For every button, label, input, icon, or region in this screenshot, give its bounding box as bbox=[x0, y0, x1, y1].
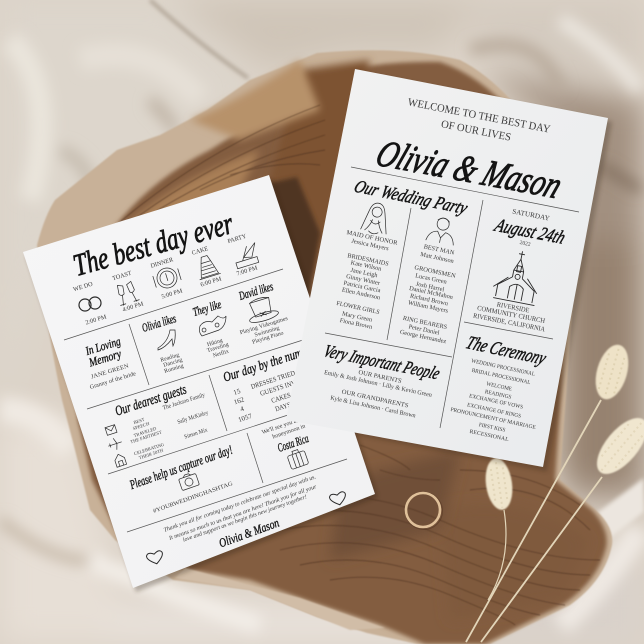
venue: COMMUNITY CHURCH bbox=[476, 305, 546, 325]
hashtag: #YOURWEDDINGHASHTAG bbox=[152, 481, 234, 515]
schedule labels: 6:00 PM bbox=[200, 275, 223, 288]
icon: champagne toast bbox=[115, 281, 140, 306]
parents and grandparents bbox=[323, 369, 433, 420]
guest awards: CELEBRATING bbox=[133, 442, 165, 456]
bridal party names: Ellen Anderson bbox=[341, 287, 382, 302]
pampas head 1 bbox=[590, 341, 634, 403]
thank you note: It means so much to us that you are here! Thank you for all your bbox=[167, 483, 318, 542]
they like: Traveling bbox=[206, 342, 230, 354]
in loving memory: Granny of the bride bbox=[89, 370, 137, 391]
bridal party names: Kate Wilson bbox=[350, 259, 383, 273]
david likes: Playing Piano bbox=[252, 330, 284, 346]
parents and grandparents: Kyle & Lisa Johnson · Carol Brown bbox=[330, 395, 417, 420]
icon: groom bbox=[426, 216, 458, 245]
bridal party names: BRIDESMAIDS bbox=[347, 252, 390, 268]
schedule labels: 5:00 PM bbox=[161, 287, 184, 300]
groom party names: RING BEARERS bbox=[402, 315, 448, 331]
icon: church bbox=[491, 247, 544, 306]
groom party names: BEST MAN bbox=[423, 243, 455, 257]
groom party names bbox=[399, 243, 457, 345]
guest awards: Sally McKinley bbox=[177, 410, 209, 426]
icon: high heel bbox=[158, 330, 175, 350]
bridal party names bbox=[336, 229, 399, 331]
welcome heading: OF OUR LIVES bbox=[440, 118, 512, 144]
ceremony order list: EXCHANGE OF VOWS bbox=[468, 393, 524, 411]
bridal party names: Fiona Brown bbox=[339, 317, 374, 331]
icon: house bbox=[113, 453, 127, 467]
capture heading: Please help us capture our day! bbox=[127, 442, 234, 492]
groom party names: George Hernandez bbox=[399, 329, 447, 345]
icon: camera bbox=[178, 472, 199, 491]
costa rica: Costa Rica bbox=[276, 431, 310, 455]
in loving memory: Memory bbox=[86, 346, 123, 370]
ceremony order list: FIRST KISS bbox=[478, 422, 506, 434]
icon: envelope bbox=[105, 425, 117, 435]
guest awards: SPEECH bbox=[132, 421, 151, 431]
we'll see you: honeymoon in bbox=[272, 424, 306, 440]
guest awards: TRAVELED bbox=[133, 426, 158, 438]
ceremony order list: PRONOUNCEMENT OF MARRIAGE bbox=[450, 407, 537, 431]
fold crease bbox=[150, 0, 248, 78]
in loving memory: In Loving bbox=[83, 334, 122, 358]
heading: the ceremony: The Ceremony bbox=[463, 333, 550, 369]
icon: heart left bbox=[146, 550, 165, 566]
olivia likes: Olivia likes bbox=[140, 311, 178, 335]
numbers list: 1057 bbox=[237, 412, 253, 424]
title: The best day ever bbox=[69, 205, 237, 283]
numbers list: 4 bbox=[239, 405, 245, 413]
they like: Hiking bbox=[206, 338, 224, 348]
icon: dinner plate bbox=[152, 265, 182, 291]
guest awards: THE FARTHEST bbox=[130, 430, 163, 444]
wood heart bbox=[76, 62, 607, 644]
signature: Olivia & Mason bbox=[217, 516, 281, 550]
guest awards bbox=[130, 392, 209, 460]
schedule labels: TOAST bbox=[111, 270, 133, 282]
thank you note: Thank you all for coming today to celebrate our special day with us. bbox=[163, 473, 317, 534]
groom party names: Peter Daniel bbox=[408, 323, 440, 337]
ceremony order list: WEDDING PROCESSIONAL bbox=[471, 358, 536, 378]
ceremony order list bbox=[450, 358, 537, 443]
left card: day timeline bbox=[23, 175, 375, 588]
thank you note: love and support as we begin this new journey together! bbox=[182, 494, 308, 544]
numbers list bbox=[232, 369, 311, 424]
icon: gramophone bbox=[232, 243, 261, 269]
numbers list: 15 bbox=[232, 387, 242, 397]
ceremony order list: EXCHANGE OF RINGS bbox=[466, 402, 522, 420]
groom party names: Matt Johnson bbox=[420, 251, 455, 265]
david likes: David likes bbox=[237, 279, 275, 303]
ceremony order list: RECESSIONAL bbox=[469, 429, 510, 443]
bridal party names: Ginny Winter bbox=[345, 273, 381, 287]
guest awards: BEST bbox=[133, 417, 145, 425]
guest awards: Simon Mix bbox=[184, 427, 208, 441]
schedule labels: CAKE bbox=[191, 245, 209, 257]
date block: August 24th bbox=[490, 215, 569, 248]
ceremony order list: BRIDAL PROCESSIONAL bbox=[471, 368, 531, 386]
heading: wedding party: Our Wedding Party bbox=[351, 176, 472, 218]
icon: plane bbox=[106, 436, 124, 452]
bridal party names: Jessica Mayers bbox=[351, 238, 390, 252]
dried pampas stems bbox=[466, 341, 644, 642]
heading: our dearest guests: Our dearest guests bbox=[113, 382, 189, 420]
right card: wedding program bbox=[286, 69, 608, 467]
schedule labels: WE DO bbox=[72, 281, 94, 293]
schedule labels: 4:00 PM bbox=[122, 300, 145, 313]
schedule labels bbox=[72, 233, 259, 326]
we'll see you bbox=[261, 418, 306, 440]
venue: RIVERSIDE, CALIFORNIA bbox=[473, 313, 546, 333]
we'll see you: We'll see you at bbox=[261, 418, 299, 436]
numbers list: DRESSES TRIED bbox=[250, 369, 296, 391]
david likes: Playing Videogames bbox=[239, 316, 290, 336]
groom party names: Lucas Green bbox=[415, 272, 448, 286]
dark shadow patch bbox=[270, 177, 320, 300]
gold ring bbox=[406, 492, 442, 530]
icon: heart right bbox=[329, 491, 348, 507]
groom party names: Richard Brown bbox=[409, 293, 449, 308]
heading: very important people: Very Important People bbox=[321, 341, 443, 383]
olivia likes: Running bbox=[164, 363, 185, 375]
guest awards: THEIR 50TH bbox=[138, 447, 164, 460]
icon: masks bbox=[199, 316, 226, 336]
numbers list: 162 bbox=[233, 395, 246, 406]
groom party names: GROOMSMEN bbox=[414, 264, 457, 280]
parents and grandparents: Emily & Josh Johnson · Lilly & Kevin Green bbox=[323, 369, 433, 399]
ceremony order list: WELCOME bbox=[486, 381, 513, 393]
in loving memory bbox=[83, 334, 137, 391]
numbers list: GUESTS INVITED bbox=[259, 374, 311, 398]
they like: They like bbox=[191, 297, 223, 319]
icon: top hat bbox=[244, 294, 280, 325]
date block bbox=[490, 207, 569, 248]
icon: suitcase bbox=[286, 448, 309, 470]
bridal party names: Patricia Garcia bbox=[343, 280, 381, 294]
pampas head 3 bbox=[483, 456, 515, 512]
olivia likes: Reading bbox=[160, 352, 180, 364]
groom party names: Josh Harrel bbox=[415, 281, 445, 293]
they like bbox=[191, 297, 230, 359]
parents and grandparents: OUR PARENTS bbox=[358, 369, 403, 385]
bridal party names: Mary Green bbox=[341, 310, 374, 324]
left card dividers bbox=[64, 269, 347, 532]
icon: wedding cake bbox=[194, 253, 221, 280]
david likes bbox=[237, 279, 290, 346]
parents and grandparents: OUR GRANDPARENTS bbox=[341, 389, 409, 410]
card dividers bbox=[325, 167, 579, 428]
david likes: Swimming bbox=[254, 325, 280, 339]
numbers list: CAKES bbox=[270, 391, 292, 405]
they like: Netflix bbox=[212, 348, 230, 359]
groom party names: William Mayers bbox=[407, 299, 449, 315]
olivia likes: Dancing bbox=[163, 357, 183, 369]
bridal party names: FLOWER GIRLS bbox=[336, 300, 381, 316]
icon: bride bbox=[360, 201, 392, 236]
guest awards: The Jackson Family bbox=[162, 392, 206, 412]
bridal party names: Jane Leigh bbox=[350, 267, 379, 279]
numbers list: DAYS bbox=[274, 401, 292, 413]
pampas head 2 bbox=[588, 410, 644, 482]
olivia likes bbox=[140, 311, 185, 375]
schedule labels: PARTY bbox=[227, 233, 248, 245]
schedule labels: 2:00 PM bbox=[85, 313, 108, 326]
heading: our day by the numbers: Our day by the numbers bbox=[221, 339, 321, 385]
couple names: Olivia & Mason bbox=[370, 134, 568, 206]
welcome heading: WELCOME TO THE BEST DAY bbox=[407, 96, 551, 136]
icon: wedding rings bbox=[79, 297, 101, 311]
date block: SATURDAY bbox=[512, 207, 550, 223]
lower rim highlight bbox=[175, 568, 385, 630]
bridal party names: MAID OF HONOR bbox=[346, 229, 399, 247]
date block: 2022 bbox=[519, 240, 531, 248]
venue: RIVERSIDE bbox=[496, 301, 530, 315]
ceremony order list: READINGS bbox=[484, 389, 512, 401]
shadow under cards bbox=[26, 72, 612, 592]
venue bbox=[473, 301, 546, 333]
groom party names: Daniel McMahon bbox=[408, 285, 454, 301]
schedule labels: 7:00 PM bbox=[236, 264, 259, 277]
grain lines bbox=[105, 105, 600, 625]
schedule labels: DINNER bbox=[150, 256, 175, 270]
in loving memory: JANE GREEN bbox=[90, 363, 130, 381]
